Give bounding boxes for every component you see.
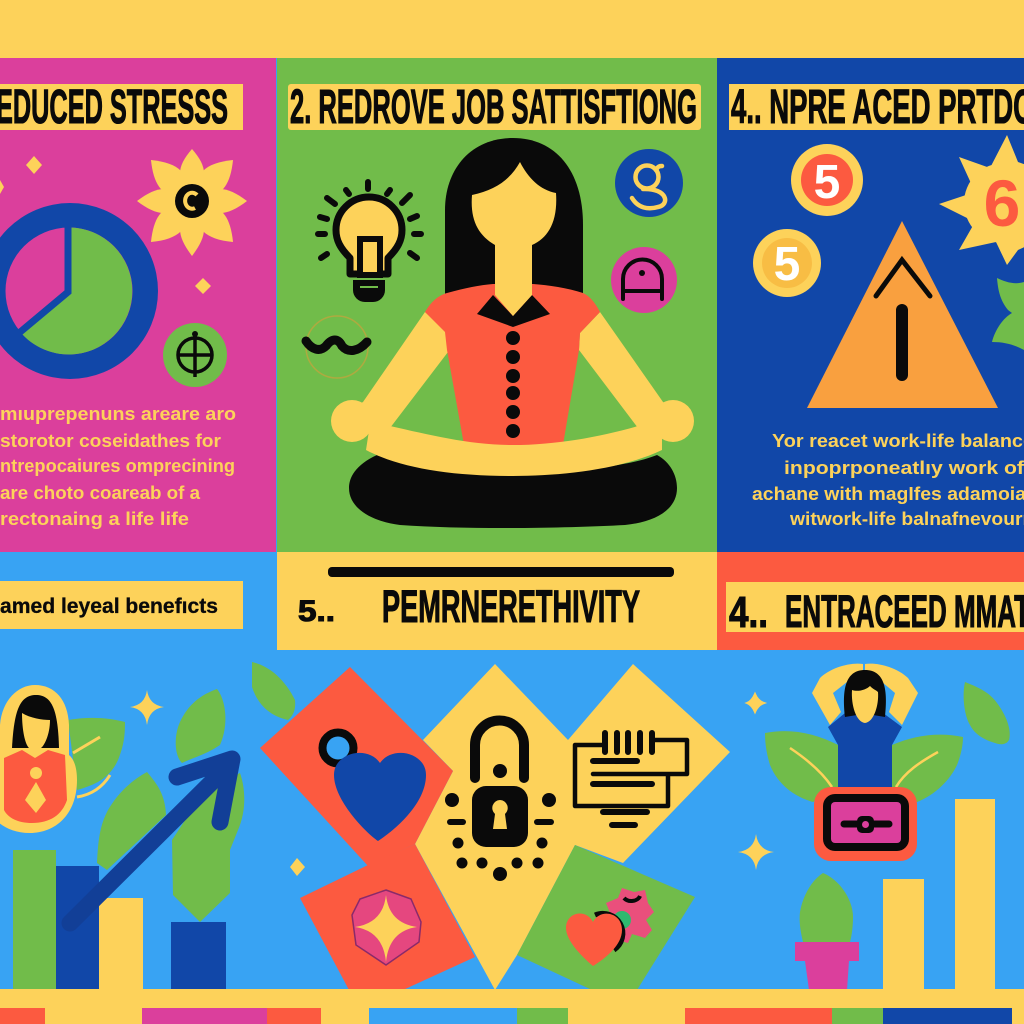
- leaf left: [765, 731, 838, 802]
- body text: [0, 404, 236, 529]
- icon: flower: [137, 149, 247, 256]
- icon: document press: [575, 733, 687, 825]
- top banner: [0, 0, 1024, 58]
- arms: [348, 312, 448, 435]
- body text: Yor reacet work-life balance: [772, 431, 1024, 451]
- panel: enhanced productivity: [717, 58, 1024, 552]
- icon: leaf: [992, 278, 1024, 350]
- panel: job satisfaction: [277, 58, 717, 552]
- icon: triangle with arrow: [807, 221, 998, 408]
- heading: reduced stress: [0, 81, 243, 134]
- arms: [812, 664, 863, 725]
- icon: potted plant: [795, 873, 859, 990]
- diamond: red star: [300, 844, 475, 990]
- icon: star lower right: [738, 834, 774, 870]
- panel: entraced heading: [717, 552, 1024, 650]
- diamond: green heart: [517, 845, 695, 990]
- body: [828, 713, 902, 787]
- diamonds cluster: [260, 664, 730, 990]
- panel: reduced stress: [0, 58, 276, 552]
- collar: [477, 295, 550, 327]
- leaf right: [892, 735, 963, 802]
- panel: permrnerethivity heading: PEMRNERETHIVITY: [382, 581, 640, 632]
- icon: target badge: [163, 323, 227, 387]
- icon: arch badge: [611, 247, 677, 313]
- icon: squiggle: [306, 316, 368, 378]
- body text: inpoprponeatlıy work of: [784, 458, 1024, 478]
- panel: entraced heading: 4..: [729, 588, 768, 637]
- bar chart right: [883, 799, 995, 990]
- body text: mıuprepenuns areare aro: [0, 404, 236, 424]
- panel: permrnerethivity heading: 5..: [298, 595, 335, 628]
- keyhole: [492, 800, 508, 829]
- icon: sparkle left edge: [0, 180, 4, 194]
- hands: [331, 400, 373, 442]
- icon: badge five top: [791, 144, 863, 216]
- heading: job satisfaction: [288, 81, 701, 134]
- figure: meditating woman: [331, 138, 694, 528]
- leaf veins: [790, 748, 938, 787]
- leaf beside woman badge: [68, 718, 125, 797]
- icon: sparkle small: [26, 156, 42, 174]
- waist wrap: [366, 424, 662, 476]
- face and neck: [472, 162, 556, 316]
- banner: learned loyal benefits: [0, 581, 243, 629]
- diamond: yellow lock: [415, 664, 730, 990]
- icon: star upper right: [747, 694, 764, 712]
- panel: permrnerethivity heading: [277, 552, 717, 650]
- leaf behind top: [176, 689, 225, 763]
- diamond: red heart: [260, 667, 453, 866]
- bar chart with growth arrow: [13, 689, 244, 990]
- icon: badge five lower: 5: [774, 238, 800, 291]
- icon: sparkle small lower: [195, 278, 211, 294]
- hair: [844, 670, 886, 717]
- body text: witwork-life balnafnevourr: [789, 509, 1024, 529]
- leaf behind right: [172, 773, 244, 922]
- icon: padlock: [445, 720, 556, 881]
- buttons: [506, 331, 520, 438]
- icon: g badge: [615, 149, 683, 217]
- briefcase: [814, 787, 917, 861]
- footer stripe: [0, 989, 1024, 1024]
- body text: [752, 431, 1024, 529]
- body text: storotor coseidathes for: [0, 431, 221, 451]
- black seat: [349, 455, 677, 528]
- icon: light bulb: [318, 182, 421, 302]
- body text: are choto coareab of a: [0, 483, 201, 503]
- icon: woman badge: [0, 685, 77, 833]
- body text: ntrepocaiures omprecining: [0, 456, 235, 476]
- arrow: [70, 759, 232, 923]
- icon: badge five top: 5: [814, 156, 840, 209]
- icon: sun six: [939, 135, 1024, 265]
- icon: badge five lower: [753, 229, 821, 297]
- heading: reduced stress: EDUCED STRESSS: [0, 81, 228, 134]
- pie chart: [0, 203, 158, 379]
- face: [852, 686, 878, 723]
- bars: [13, 850, 56, 990]
- icon: star left: [130, 690, 164, 725]
- leaf behind left: [97, 772, 166, 870]
- body text: rectonaing a life life: [0, 509, 189, 529]
- icon: sparkle beside diamonds: [290, 858, 305, 876]
- body text: achane with magIfes adamoia: [752, 484, 1024, 504]
- blouse: [425, 284, 600, 445]
- banner: learned loyal benefits: amed leyeal benefıcts: [0, 595, 218, 618]
- icon: sun six: 6: [984, 166, 1020, 240]
- icon: leaf top centre: [252, 662, 295, 720]
- figure: person with raised arms: [765, 664, 1010, 861]
- hair: [445, 138, 583, 296]
- leaf far right: [964, 682, 1010, 744]
